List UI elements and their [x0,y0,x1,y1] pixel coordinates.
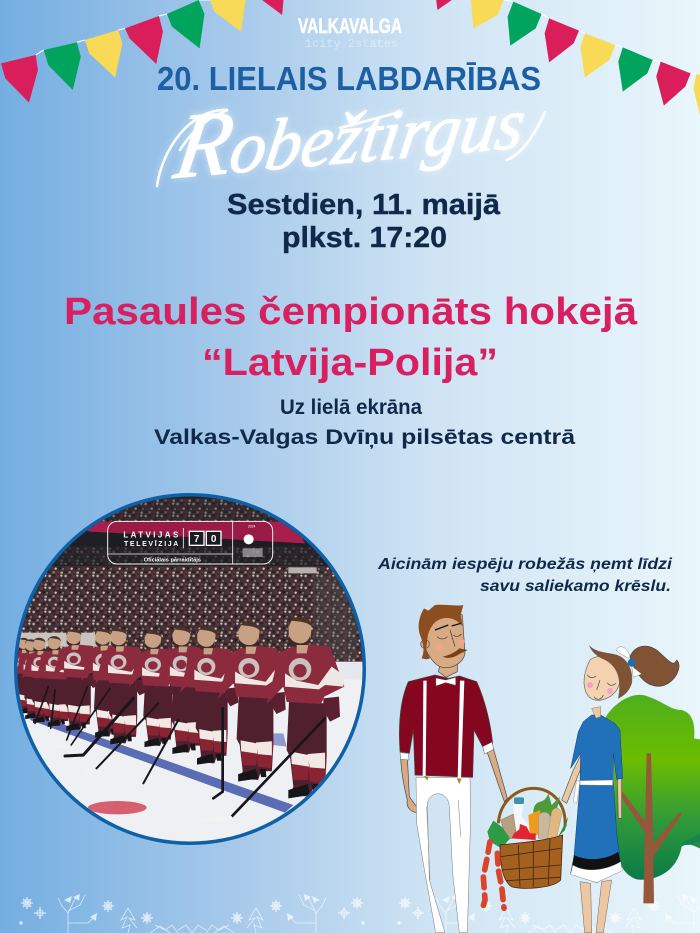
screening location: Uz lielā ekrāna [280,396,422,419]
icon: woman [562,646,679,933]
broadcaster badge: 2024 [248,524,256,528]
date and time [227,189,501,254]
broadcaster badge: 7 [194,534,200,545]
ice [10,677,367,850]
broadcaster badge: LATVIJAS [123,530,179,539]
broadcaster badge: Oficiālais pārraidītājs [144,557,201,563]
invitation note [377,556,673,595]
date and time: plkst. 17:20 [282,222,447,254]
broadcaster badge [108,521,273,564]
icon: tree [605,695,700,903]
script title: Robežtirgus [168,65,534,199]
event title [64,291,638,384]
screening location [154,396,575,449]
broadcaster badge: 0 [211,534,217,545]
logo [298,15,402,51]
invitation note: savu saliekamo krēslu. [480,578,671,595]
footer ornaments [20,894,700,933]
bunting flags [1,0,700,115]
invitation note: Aicinām iespēju robežās ņemt līdzi [377,556,673,573]
hockey team photo [8,490,370,850]
illustration: couple with basket [399,605,700,933]
heading: 20. LIELAIS LABDARĪBAS [157,60,541,97]
event title: Pasaules čempionāts hokejā [64,291,638,333]
event title: “Latvija-Polija” [202,342,498,384]
screening location: Valkas-Valgas Dvīņu pilsētas centrā [154,426,575,449]
icon: man [399,605,507,933]
players [8,617,344,798]
logo: 1city 2states [305,38,398,51]
logo: VALKAVALGA [298,15,402,38]
hockey sticks [35,687,325,820]
broadcaster badge: TELEVĪZIJA [124,540,178,548]
icon: basket of food [482,788,568,912]
date and time: Sestdien, 11. maijā [227,189,501,221]
